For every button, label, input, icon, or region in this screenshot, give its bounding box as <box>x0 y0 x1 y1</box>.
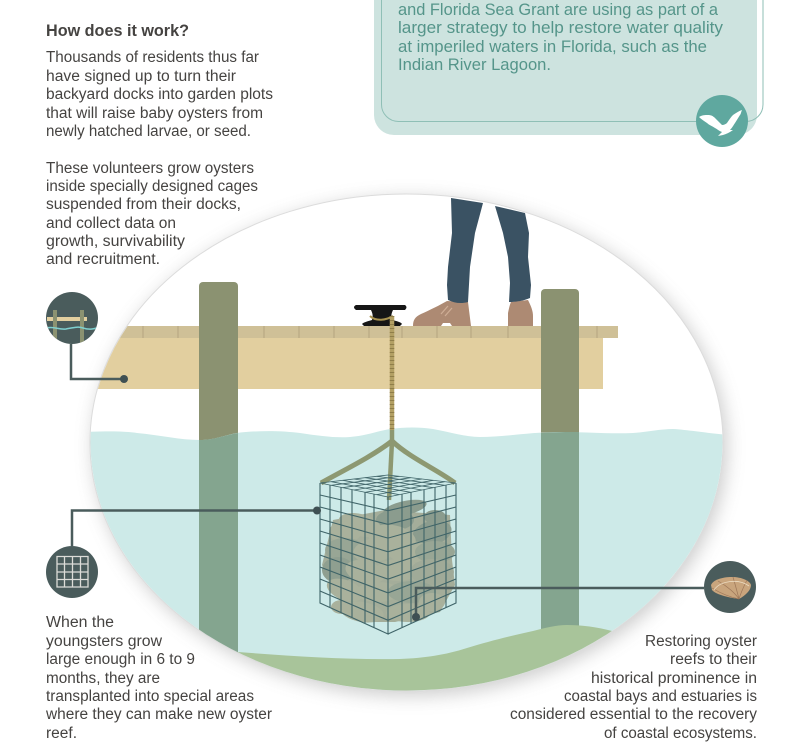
text block: transplant: transplanted into special areas <box>46 688 254 705</box>
text block: restoring reefs: considered essential to the recovery <box>510 706 757 723</box>
text block: intro paragraphs <box>46 49 273 268</box>
text block: intro paragraphs: These volunteers grow oysters <box>46 160 254 177</box>
right leg <box>495 206 531 302</box>
callout text <box>398 0 723 74</box>
text block: restoring reefs <box>510 633 757 742</box>
right shoe <box>508 300 533 326</box>
text block: intro paragraphs: backyard docks into garden plots <box>46 86 273 103</box>
icon: dock <box>46 292 98 344</box>
text block: transplant <box>45 614 272 742</box>
text block: restoring reefs: coastal bays and estuaries is <box>564 688 757 705</box>
text block: intro paragraphs: growth, survivability <box>46 233 185 250</box>
heading: how does it work: How does it work? <box>46 22 189 40</box>
text block: restoring reefs: of coastal ecosystems. <box>604 725 757 742</box>
dock <box>85 326 618 389</box>
water <box>85 428 730 700</box>
callout text: at imperiled waters in Florida, such as the <box>398 37 707 56</box>
text block: transplant: reef. <box>46 725 77 742</box>
callout: shell icon and connector <box>412 561 756 621</box>
text block: intro paragraphs: newly hatched larvae, or seed. <box>46 123 251 140</box>
panel: circular dock scene <box>85 194 730 700</box>
callout text: Indian River Lagoon. <box>398 55 551 74</box>
icon: bird <box>696 95 748 147</box>
text block: transplant: When the <box>46 614 114 631</box>
text block: intro paragraphs: and collect data on <box>46 215 176 232</box>
submerged pilings <box>199 432 579 652</box>
text block: transplant: where they can make new oyster <box>45 706 272 723</box>
panel: intro callout <box>374 0 763 147</box>
text block: restoring reefs: reefs to their <box>670 651 757 668</box>
text block: transplant: months, they are <box>46 670 160 687</box>
callout: dock icon and connector <box>46 292 128 383</box>
cage wire mesh <box>320 475 456 634</box>
text block: intro paragraphs: Thousands of residents thus far <box>46 49 259 66</box>
text block: intro paragraphs: have signed up to turn their <box>46 68 236 85</box>
text block: intro paragraphs: and recruitment. <box>46 251 160 268</box>
left shoe <box>413 301 471 326</box>
callout text: and Florida Sea Grant are using as part of a <box>398 0 719 19</box>
scene shadow <box>93 198 727 696</box>
oysters <box>322 497 455 626</box>
dock piling: right <box>541 289 579 433</box>
sea floor <box>238 625 612 690</box>
icon: oyster shell <box>704 561 756 613</box>
text block: transplant: youngsters grow <box>46 633 163 650</box>
oyster cage <box>320 475 456 634</box>
rope <box>321 316 455 500</box>
callout text: larger strategy to help restore water quality <box>398 18 723 37</box>
icon: wire grid <box>46 546 98 598</box>
text block: intro paragraphs: inside specially designed cages <box>46 178 258 195</box>
text block: restoring reefs: Restoring oyster <box>645 633 757 650</box>
person legs and shoes <box>413 198 533 326</box>
left leg <box>447 198 483 303</box>
text block: restoring reefs: historical prominence in <box>591 670 757 687</box>
cleat <box>354 305 406 326</box>
text block: intro paragraphs: that will raise baby oysters from <box>46 105 263 122</box>
text block: transplant: large enough in 6 to 9 <box>46 651 195 668</box>
callout: cage icon and connector <box>46 506 321 598</box>
text block: intro paragraphs: suspended from their docks, <box>46 196 241 213</box>
dock piling: left <box>199 282 238 652</box>
